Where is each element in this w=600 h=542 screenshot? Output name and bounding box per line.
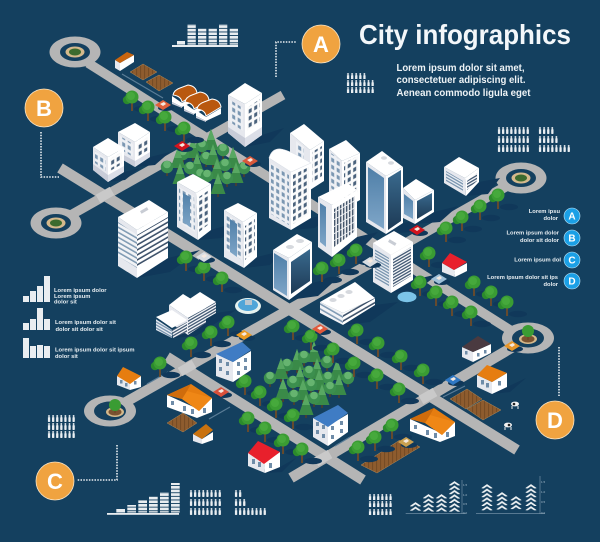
intro paragraph: Lorem ipsum dolor sit amet, [396,62,525,74]
cows [504,402,519,430]
farmhouse: left [167,384,212,418]
bar chart: top [172,24,238,47]
people icons: right [497,127,571,152]
legend: right: dolor [544,216,559,222]
bar chart with text 3: dolor sit [55,354,78,360]
bar chart with text 2: dolor sit dolor sit [56,327,103,333]
badge A [302,25,340,63]
road network [55,63,528,480]
tower: striped right [373,231,413,293]
dotted connectors [41,42,559,480]
badge A: A [313,32,329,57]
hangars [172,85,221,122]
title: City infographics [359,19,571,50]
farmhouse: right [410,408,455,442]
pond [398,292,416,302]
tower: dark stripes [318,183,357,257]
chevron chart: left: 1.5 [463,483,468,487]
legend: right: Lorem ipsum dol [514,258,561,264]
building complex [156,292,216,338]
vehicles [155,100,523,448]
tower: striped wide [118,200,168,278]
tower: centre left [177,174,211,240]
legend: right: C [568,256,576,266]
legend: right [487,208,580,289]
house: red lower [248,441,296,473]
people icons: bottom [189,490,267,515]
building shadows [108,128,500,338]
people icons: top [346,73,375,93]
farm fields [130,64,501,473]
bar chart with text 1: dolor sit [54,300,77,306]
legend: right: Lorem ipsum dolor [506,230,560,236]
legend: right: B [568,234,576,244]
bar chart with text 3 [23,338,135,360]
legend: right: dolor [544,282,559,288]
house: blue right [313,405,348,446]
shed: lower left [193,424,213,444]
legend: right: Lorem ipsum dolor sit ips [487,275,558,281]
chevron chart: left: 1.0 [463,493,468,497]
roundabout: top left [50,36,100,68]
chevron chart: right [476,476,546,515]
house: dark roof [462,336,491,362]
building: small rear [118,123,150,167]
legend: right: D [568,276,576,288]
chevron chart: right: 0.0 [541,511,546,515]
building: low striped right [444,157,479,196]
forest: upper [161,129,250,197]
fountain [235,298,261,314]
bar chart with text 3: Lorem ipsum dolor sit ipsum [55,348,135,354]
house: red right [442,253,467,277]
intro paragraph: Aenean commodo ligula eget [396,87,531,99]
badge B: B [36,96,52,121]
badge B [25,89,63,127]
chevron chart: right: 1.5 [541,480,546,484]
tower: centre [224,203,257,268]
chevron chart: left: 0.5 [463,502,468,506]
legend: right: A [568,212,576,222]
shed: top left [115,52,134,71]
intro paragraph [396,62,531,99]
badge C: C [47,469,63,494]
building: blue cube [403,179,434,224]
tower: blue glass front [273,234,312,300]
building: low flat [320,282,375,325]
tower: rear centre right [329,140,360,210]
legend: right: dolor sit dolor [520,238,560,244]
people icons: bottom right [368,494,393,515]
bar chart with text 2: Lorem ipsum dolor sit [55,320,116,326]
badge D [536,401,574,439]
bar chart with text 1: Lorem ipsum [54,294,90,300]
roundabout: right [496,162,546,194]
bar chart with text 1: Lorem ipsum dolor [54,288,107,294]
roundabout: lower right with tree [502,322,554,354]
badge D: D [547,408,563,433]
badge C [36,462,74,500]
roundabout: left [30,208,82,238]
bar chart: bottom [107,483,180,515]
tower: rear centre [290,124,324,200]
intro paragraph: consectetuer adipiscing elit. [396,74,526,86]
chevron chart: left [406,480,468,515]
tree rows [123,90,527,464]
chevron chart: right: 1.0 [541,490,546,494]
house: orange right [477,365,526,394]
bar chart with text 1 [23,276,107,306]
tower: domed [269,149,311,230]
building: small front [93,138,124,182]
bar chart with text 2 [23,308,116,333]
house: small orange left [117,367,141,390]
chevron chart: right: 0.5 [541,500,546,504]
thin road markings [122,74,465,446]
legend: right: Lorem ipsu [529,209,560,215]
house: blue left [216,342,251,382]
people icons: left [47,415,76,438]
tower: blue glass [366,151,403,234]
chevron chart: left: 0.0 [463,511,468,515]
roundabout: bottom left with tree [84,396,136,426]
tower: upper left [228,83,262,147]
forest: lower [264,341,354,418]
